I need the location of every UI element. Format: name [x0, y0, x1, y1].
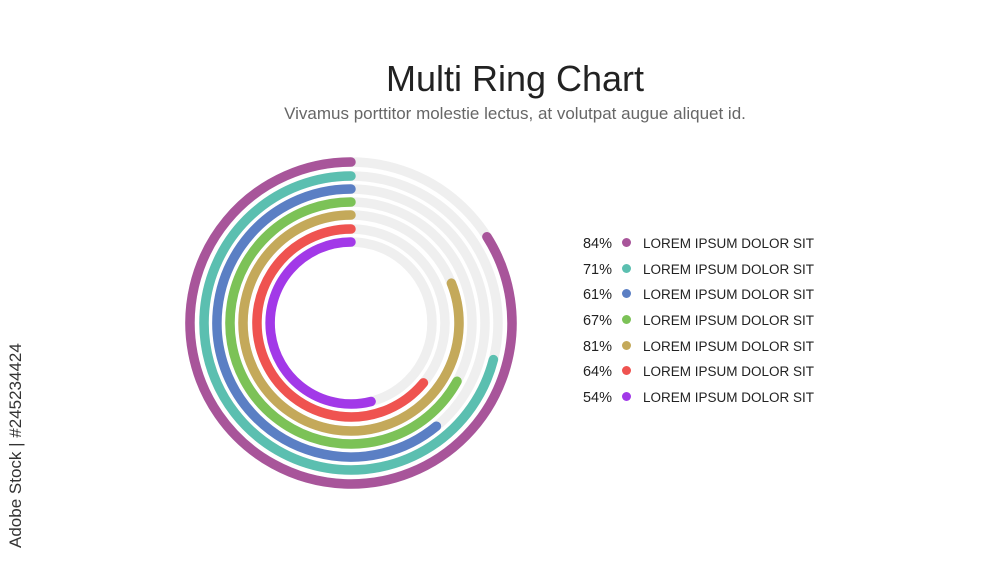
legend row 2	[583, 262, 814, 278]
legend	[583, 236, 814, 406]
legend row 5: 81%	[583, 339, 612, 355]
legend row 3: 61%	[583, 287, 612, 303]
title: Multi Ring Chart	[386, 58, 644, 99]
legend row 5: LOREM IPSUM DOLOR SIT	[643, 339, 814, 354]
legend row 3	[583, 287, 814, 303]
legend row 6: 64%	[583, 364, 612, 380]
legend row 1	[583, 236, 814, 252]
legend row 1: LOREM IPSUM DOLOR SIT	[643, 236, 814, 251]
legend row 1: 84%	[583, 236, 612, 252]
legend row 4: 67%	[583, 313, 612, 329]
legend row 2: LOREM IPSUM DOLOR SIT	[643, 262, 814, 277]
legend row 5	[583, 339, 814, 355]
legend row 4: LOREM IPSUM DOLOR SIT	[643, 313, 814, 328]
legend row 7: 54%	[583, 390, 612, 406]
legend row 6	[583, 364, 814, 380]
legend row 4	[583, 313, 814, 329]
legend row 7	[583, 390, 814, 406]
subtitle: Vivamus porttitor molestie lectus, at volutpat augue aliquet id.	[284, 104, 746, 123]
legend row 6: LOREM IPSUM DOLOR SIT	[643, 364, 814, 379]
legend row 3: LOREM IPSUM DOLOR SIT	[643, 287, 814, 302]
watermark text: Adobe Stock | #245234424	[6, 343, 25, 548]
legend row 7: LOREM IPSUM DOLOR SIT	[643, 390, 814, 405]
legend row 2: 71%	[583, 262, 612, 278]
